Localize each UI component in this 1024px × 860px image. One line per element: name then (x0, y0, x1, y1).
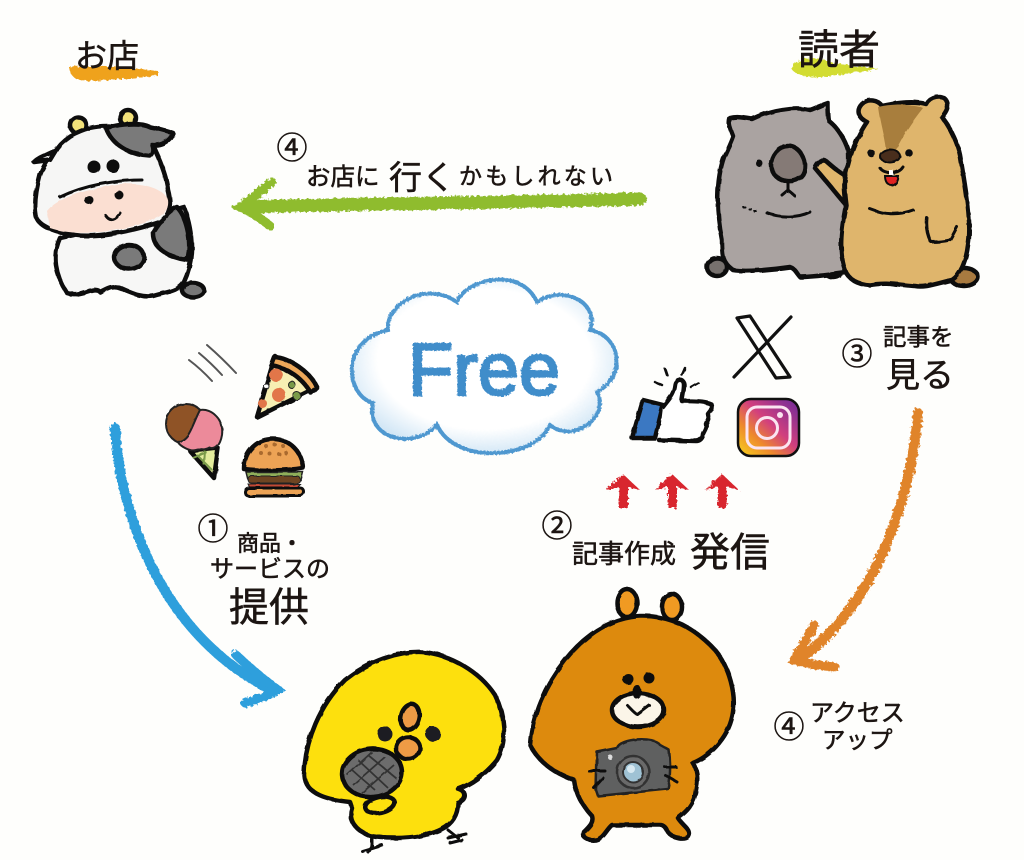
bear ears (617, 589, 637, 617)
arrow: provide to media (115, 428, 278, 703)
chick beak (398, 702, 422, 732)
label: access up: ④ (774, 710, 804, 745)
cow body (56, 207, 192, 296)
label: provide goods and services: 商品・ (237, 531, 303, 556)
label: provide goods and services: ① (198, 512, 228, 547)
label: may visit shop: ④ (276, 131, 308, 166)
label: view article: ③ (842, 337, 872, 372)
character: bear with camera (530, 589, 734, 840)
heading: shop: お店 (75, 38, 139, 74)
label: access up: アップ (822, 727, 893, 753)
cloud: Free: Free (408, 328, 560, 411)
chipmunk arm (815, 160, 850, 205)
icon: pizza (257, 356, 317, 417)
label: may visit shop (276, 131, 616, 196)
label: provide goods and services: サービスの (210, 556, 330, 583)
microphone (340, 746, 404, 800)
character: chipmunk (815, 97, 978, 287)
cow ear (34, 150, 56, 162)
label: provide goods and services: 提供 (229, 586, 309, 630)
arrow: visit shop (240, 182, 640, 226)
label: view article: 見る (886, 357, 954, 395)
cow side patch (153, 207, 189, 260)
label: view article: 記事を (883, 324, 954, 350)
character: wombat (707, 103, 850, 277)
chipmunk body (841, 97, 969, 287)
icon: thumbs up (632, 368, 712, 441)
cloud: Free (352, 280, 617, 453)
cow spot (114, 245, 144, 269)
cow muzzle (47, 184, 168, 233)
illustration: food (166, 345, 317, 496)
wombat nose (771, 146, 805, 181)
label: write and publish: 記事作成 (572, 539, 676, 569)
label: write and publish (542, 509, 770, 575)
label: write and publish: ② (542, 509, 572, 544)
cow head patch (106, 124, 173, 156)
cow head (35, 126, 170, 236)
label: access up (774, 700, 905, 753)
label: may visit shop: かもしれない (459, 163, 616, 189)
bear body (530, 616, 734, 840)
label: provide goods and services (198, 512, 330, 630)
camera (596, 739, 670, 796)
chick feet (362, 830, 466, 852)
icon: X logo (734, 316, 791, 378)
wombat body (718, 103, 850, 277)
chipmunk tongue (885, 176, 898, 185)
cow horns (70, 117, 86, 133)
icon: Instagram logo (738, 399, 799, 456)
chick hand (364, 794, 396, 816)
arrows: three red up arrows (606, 474, 739, 508)
heading: readers: 読者 (798, 27, 880, 73)
motion lines (189, 345, 236, 381)
chipmunk stripe (878, 104, 923, 150)
label: may visit shop: お店に (306, 164, 380, 191)
arrow: view to access (794, 413, 918, 667)
character: yellow chick (304, 652, 504, 852)
label: access up: アクセス (810, 700, 905, 727)
label: view article (842, 324, 954, 395)
icon: burger (244, 439, 304, 496)
wombat feet (707, 258, 727, 276)
icon: ice cream (166, 404, 222, 478)
character: cow (shop) (34, 110, 204, 297)
heading: shop (69, 38, 158, 81)
label: may visit shop: 行く (389, 159, 455, 196)
label: write and publish: 発信 (690, 531, 770, 575)
chipmunk tail (950, 268, 978, 286)
chick body (304, 652, 504, 838)
bear muzzle (612, 693, 664, 727)
